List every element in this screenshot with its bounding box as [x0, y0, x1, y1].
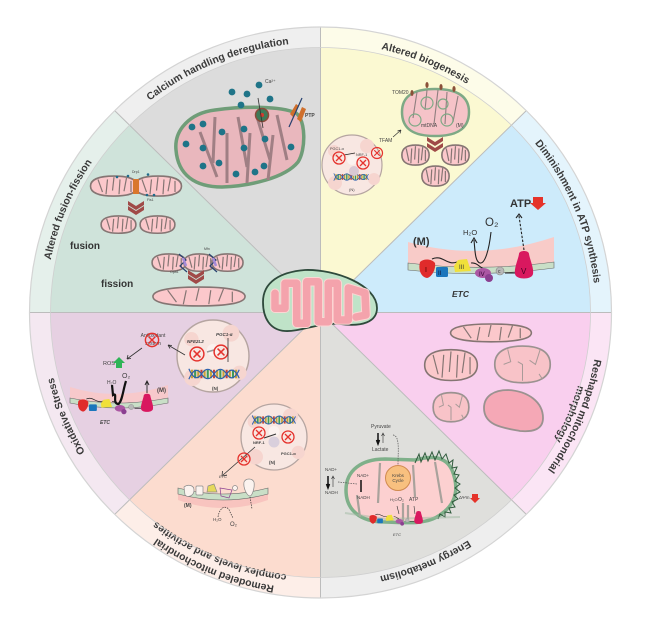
heading: reshaped mitochondrial morphology: morphology	[554, 386, 584, 443]
illustration: electron transport chain: IV	[479, 272, 485, 278]
illustration: metabolic mitochondrion: NADH	[357, 495, 370, 500]
panel: reshaped mitochondrial morphology	[334, 313, 611, 514]
panel: altered biogenesis	[321, 28, 526, 280]
illustration: oxidative stress pathway: ROS	[103, 361, 115, 367]
illustration: fusion and fission mitochondria: Mfn	[204, 247, 210, 251]
panel: oxidative stress	[30, 313, 302, 514]
illustration: metabolic mitochondrion: O₂	[398, 497, 404, 503]
illustration: fusion and fission mitochondria: Fis1	[147, 198, 154, 202]
illustration: mitochondrial biogenesis: TOM20	[392, 90, 409, 96]
illustration: remodeled electron transport chain: PGC1-α	[281, 451, 296, 456]
illustration: oxidative stress pathway: NFE2L2	[187, 339, 204, 344]
illustration: calcium-loaded mitochondrion	[176, 79, 315, 187]
illustration: oxidative stress pathway: H₂O	[107, 380, 117, 386]
panel: diminishment in ATP synthesis	[354, 112, 611, 312]
illustration: oxidative stress pathway: Antioxidant	[141, 333, 166, 339]
illustration: metabolic mitochondrion: NAD+	[325, 467, 338, 472]
heading: energy metabolism: Energy metabolism	[380, 540, 472, 582]
illustration: metabolic mitochondrion	[325, 424, 480, 537]
illustration: fusion and fission mitochondria: Drp1	[132, 170, 140, 174]
heading: altered biogenesis: Altered biogenesis	[381, 42, 469, 84]
illustration: fusion and fission mitochondria: Opa1	[170, 270, 179, 274]
illustration: metabolic mitochondrion: Pyruvate	[371, 424, 391, 430]
panel: calcium handling deregulation	[116, 28, 320, 274]
illustration: electron transport chain: I	[425, 267, 427, 274]
illustration: fusion and fission mitochondria: fusion	[70, 241, 100, 252]
illustration: oxidative stress pathway: system	[145, 341, 161, 347]
illustration: mitochondrial biogenesis: TFAM	[379, 138, 392, 144]
illustration: remodeled electron transport chain: ETC	[219, 474, 227, 479]
illustration: oxidative stress pathway	[70, 320, 249, 426]
illustration: metabolic mitochondrion: Lactate	[372, 447, 389, 453]
illustration: mitochondrial biogenesis: (N)	[349, 187, 355, 192]
heading: remodeled mitochondrial complex levels and activities: Remodeled mitochondrial	[153, 538, 274, 593]
illustration: electron transport chain	[408, 197, 554, 299]
illustration: fusion and fission mitochondria: fission	[101, 279, 133, 290]
heading: altered fusion-fission: Altered fusion-fission	[44, 160, 92, 260]
illustration: metabolic mitochondrion: ΔΨm	[459, 495, 470, 500]
illustration: electron transport chain: O₂	[485, 217, 498, 229]
illustration: remodeled electron transport chain: (M)	[184, 503, 192, 509]
heading: diminishment in ATP synthesis: Diminishment in ATP synthesis	[535, 139, 600, 283]
icon: central mitochondrion	[263, 270, 377, 331]
illustration: remodeled electron transport chain: NRF-1	[253, 440, 266, 445]
illustration: remodeled electron transport chain: (N)	[269, 460, 276, 465]
illustration: electron transport chain: II	[438, 271, 442, 277]
panel: energy metabolism	[321, 324, 526, 598]
illustration: oxidative stress pathway: PGC1-α	[216, 332, 233, 337]
illustration: electron transport chain: V	[521, 267, 527, 276]
illustration: metabolic mitochondrion: H₂O	[390, 497, 398, 502]
illustration: electron transport chain: III	[459, 265, 464, 271]
heading: calcium handling deregulation: Calcium handling deregulation	[147, 38, 288, 100]
illustration: calcium-loaded mitochondrion: PTP	[305, 113, 315, 119]
illustration: metabolic mitochondrion: NAD+	[357, 473, 370, 478]
illustration: oxidative stress pathway: (M)	[157, 388, 166, 394]
illustration: electron transport chain: ETC	[452, 289, 470, 299]
illustration: electron transport chain: H₂O	[463, 228, 477, 237]
illustration: electron transport chain: c	[498, 269, 501, 275]
illustration: metabolic mitochondrion: NADH	[325, 490, 338, 495]
heading: reshaped mitochondrial morphology: Reshaped mitochondrial	[548, 360, 602, 474]
illustration: oxidative stress pathway: (N)	[212, 386, 219, 391]
illustration: metabolic mitochondrion: ATP	[409, 497, 419, 503]
illustration: mitochondrial biogenesis: (M)	[456, 123, 464, 129]
heading: oxidative stress: Oxidative Stress	[48, 378, 84, 454]
illustration: fusion and fission mitochondria	[70, 170, 245, 306]
illustration: mitochondrial biogenesis: PGC1-α	[330, 147, 345, 151]
illustration: oxidative stress pathway: O₂	[122, 373, 130, 380]
illustration: remodeled electron transport chain	[178, 404, 307, 528]
panel: altered fusion-fission	[30, 112, 281, 312]
illustration: mitochondrial biogenesis	[322, 82, 469, 195]
illustration: electron transport chain: (M)	[413, 236, 430, 248]
illustration: metabolic mitochondrion: Cycle	[392, 478, 404, 483]
illustration: mitochondrial biogenesis: NRF-1	[356, 153, 367, 157]
illustration: metabolic mitochondrion: Krebs	[392, 473, 405, 478]
illustration: mitochondrial shapes	[425, 324, 550, 431]
illustration: remodeled electron transport chain: H₂O	[213, 517, 222, 522]
illustration: electron transport chain: ATP	[510, 198, 531, 210]
illustration: calcium-loaded mitochondrion: Ca²⁺	[265, 79, 276, 85]
panel: remodeled mitochondrial complex levels and activities	[116, 326, 320, 598]
heading: remodeled mitochondrial complex levels and activities: complex levels and activities	[154, 522, 286, 580]
illustration: mitochondrial biogenesis: mtDNA	[421, 123, 438, 129]
illustration: metabolic mitochondrion: ETC	[393, 532, 401, 537]
illustration: remodeled electron transport chain: O₂	[230, 522, 238, 528]
illustration: oxidative stress pathway: ETC	[100, 420, 110, 426]
